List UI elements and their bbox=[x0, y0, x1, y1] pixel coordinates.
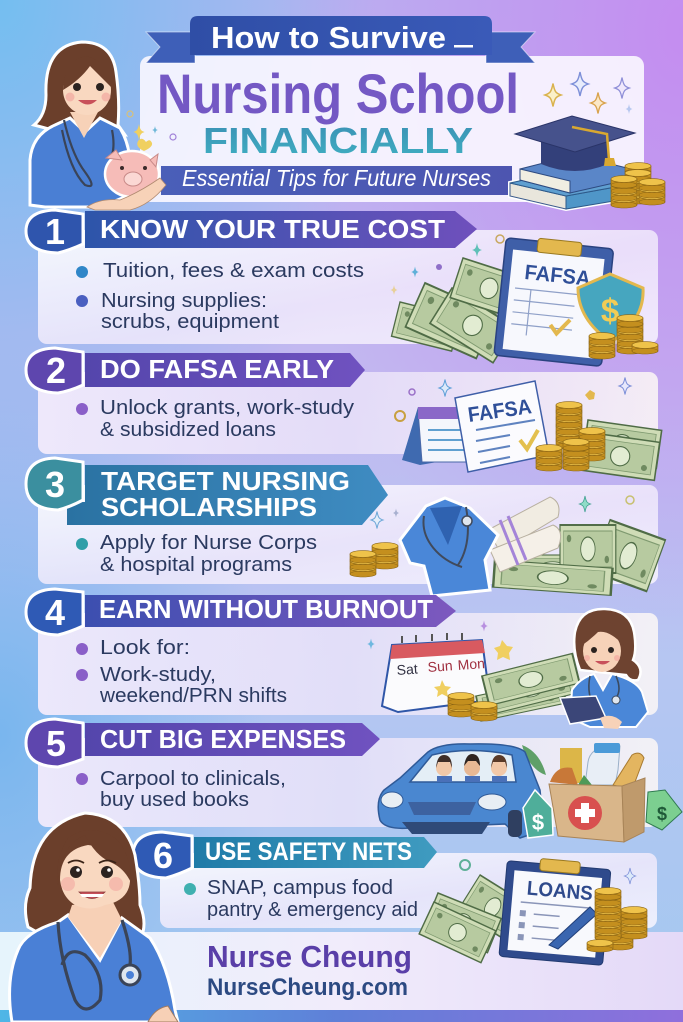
icon: FAFSA form with calendar, coins and money bbox=[395, 378, 662, 480]
icon: grocery bag with medical cross and tags: $ bbox=[532, 810, 544, 835]
icon: large nurse portrait bbox=[10, 813, 178, 1022]
icon: blue car with passengers bbox=[378, 744, 546, 838]
tip 5 text: Carpool to clinicals, bbox=[100, 768, 286, 790]
icon: nurse with tablet bbox=[560, 609, 648, 729]
tip 3 text bbox=[76, 532, 317, 576]
icon: FAFSA clipboard with money and shield: FAFSA bbox=[524, 261, 592, 291]
tip 3 header bbox=[26, 458, 388, 525]
tip 3 text: & hospital programs bbox=[100, 554, 292, 576]
tip 4 header: EARN WITHOUT BURNOUT bbox=[99, 594, 433, 624]
tip 3 header: SCHOLARSHIPS bbox=[101, 492, 317, 522]
tip 5 header: CUT BIG EXPENSES bbox=[100, 724, 346, 754]
tip 3 header: 3 bbox=[45, 464, 65, 505]
tip 1 header bbox=[26, 210, 477, 253]
panel: footer bbox=[0, 932, 683, 1010]
tip 4 text: Look for: bbox=[100, 637, 190, 659]
tip 5 header: 5 bbox=[46, 723, 66, 764]
tip 1 text: scrubs, equipment bbox=[101, 311, 279, 333]
tip 1 header: 1 bbox=[45, 211, 65, 252]
banner: How to Survive bbox=[146, 16, 535, 63]
title: Nursing School: Nursing School bbox=[157, 62, 519, 125]
icon: scrubs, diploma scrolls, coins and money bbox=[350, 496, 665, 596]
tip 4 text: weekend/PRN shifts bbox=[99, 685, 287, 707]
tip 6 text: SNAP, campus food bbox=[207, 877, 393, 899]
tip 6 header bbox=[133, 832, 437, 878]
icon: weekend calendar, money and coins: Sun bbox=[427, 657, 453, 675]
icon: FAFSA form with calendar, coins and money: FAFSA bbox=[466, 395, 533, 427]
tip 2 header bbox=[26, 348, 365, 393]
icon: loans clipboard, money, pen and coins bbox=[419, 856, 647, 965]
tip 5 text bbox=[76, 768, 286, 811]
brand: website: NurseCheung.com bbox=[207, 974, 408, 1001]
icon: weekend calendar, money and coins bbox=[367, 620, 580, 721]
icon: grocery bag with medical cross and tags bbox=[523, 743, 682, 842]
tip 3 text: Apply for Nurse Corps bbox=[100, 532, 317, 554]
tip 2 header: 2 bbox=[46, 350, 66, 391]
icon: weekend calendar, money and coins: Sat bbox=[396, 661, 418, 678]
tip 1 text: Nursing supplies: bbox=[101, 290, 267, 312]
tip 2 text: Unlock grants, work-study bbox=[100, 397, 354, 419]
footer strip bbox=[0, 1010, 683, 1022]
tip 6 header: 6 bbox=[153, 835, 173, 876]
icon: header sparkles bbox=[545, 72, 632, 114]
subtitle bar: Essential Tips for Future Nurses bbox=[182, 165, 491, 191]
tip 1 text: Tuition, fees & exam costs bbox=[103, 260, 364, 282]
icon: grocery bag with medical cross and tags: $ bbox=[657, 804, 667, 824]
tip 4 header: 4 bbox=[45, 592, 65, 633]
panel: tip 5 bbox=[38, 738, 658, 827]
tip 6 text: pantry & emergency aid bbox=[207, 899, 418, 921]
tip 2 text bbox=[76, 397, 354, 441]
tip 4 text: Work-study, bbox=[100, 664, 216, 686]
icon: loans clipboard, money, pen and coins: LOANS bbox=[526, 878, 594, 905]
title: Financially: FINANCIALLY bbox=[203, 120, 473, 161]
tip 1 text bbox=[76, 260, 364, 333]
tip 4 header bbox=[26, 589, 456, 635]
tip 2 text: & subsidized loans bbox=[100, 419, 276, 441]
tip 2 header: DO FAFSA EARLY bbox=[100, 354, 334, 384]
tip 3 header: TARGET NURSING bbox=[101, 466, 350, 496]
brand: Nurse Cheung: Nurse Cheung bbox=[207, 939, 412, 974]
panel: tip 6 bbox=[160, 853, 657, 928]
icon: books, graduation cap and coins bbox=[510, 116, 665, 209]
icon: nurse with piggy bank bbox=[30, 42, 176, 210]
panel: tip 3 bbox=[38, 485, 658, 584]
panel: tip 1 bbox=[38, 230, 658, 344]
tip 6 header: USE SAFETY NETS bbox=[205, 838, 412, 866]
icon: FAFSA clipboard with money and shield: $ bbox=[601, 292, 619, 329]
tip 5 text: buy used books bbox=[100, 789, 249, 811]
panel: tip 2 bbox=[38, 372, 658, 454]
tip 6 text bbox=[184, 877, 418, 921]
tip 1 header: KNOW YOUR TRUE COST bbox=[100, 214, 445, 244]
icon: weekend calendar, money and coins: Mon bbox=[457, 655, 485, 673]
banner: How to Survive: How to Survive bbox=[211, 20, 446, 55]
panel: tip 4 bbox=[38, 613, 658, 715]
tip 4 text bbox=[76, 637, 287, 707]
panel: header card bbox=[140, 56, 644, 202]
icon: FAFSA clipboard with money and shield bbox=[390, 235, 658, 366]
tip 5 header bbox=[26, 719, 380, 767]
